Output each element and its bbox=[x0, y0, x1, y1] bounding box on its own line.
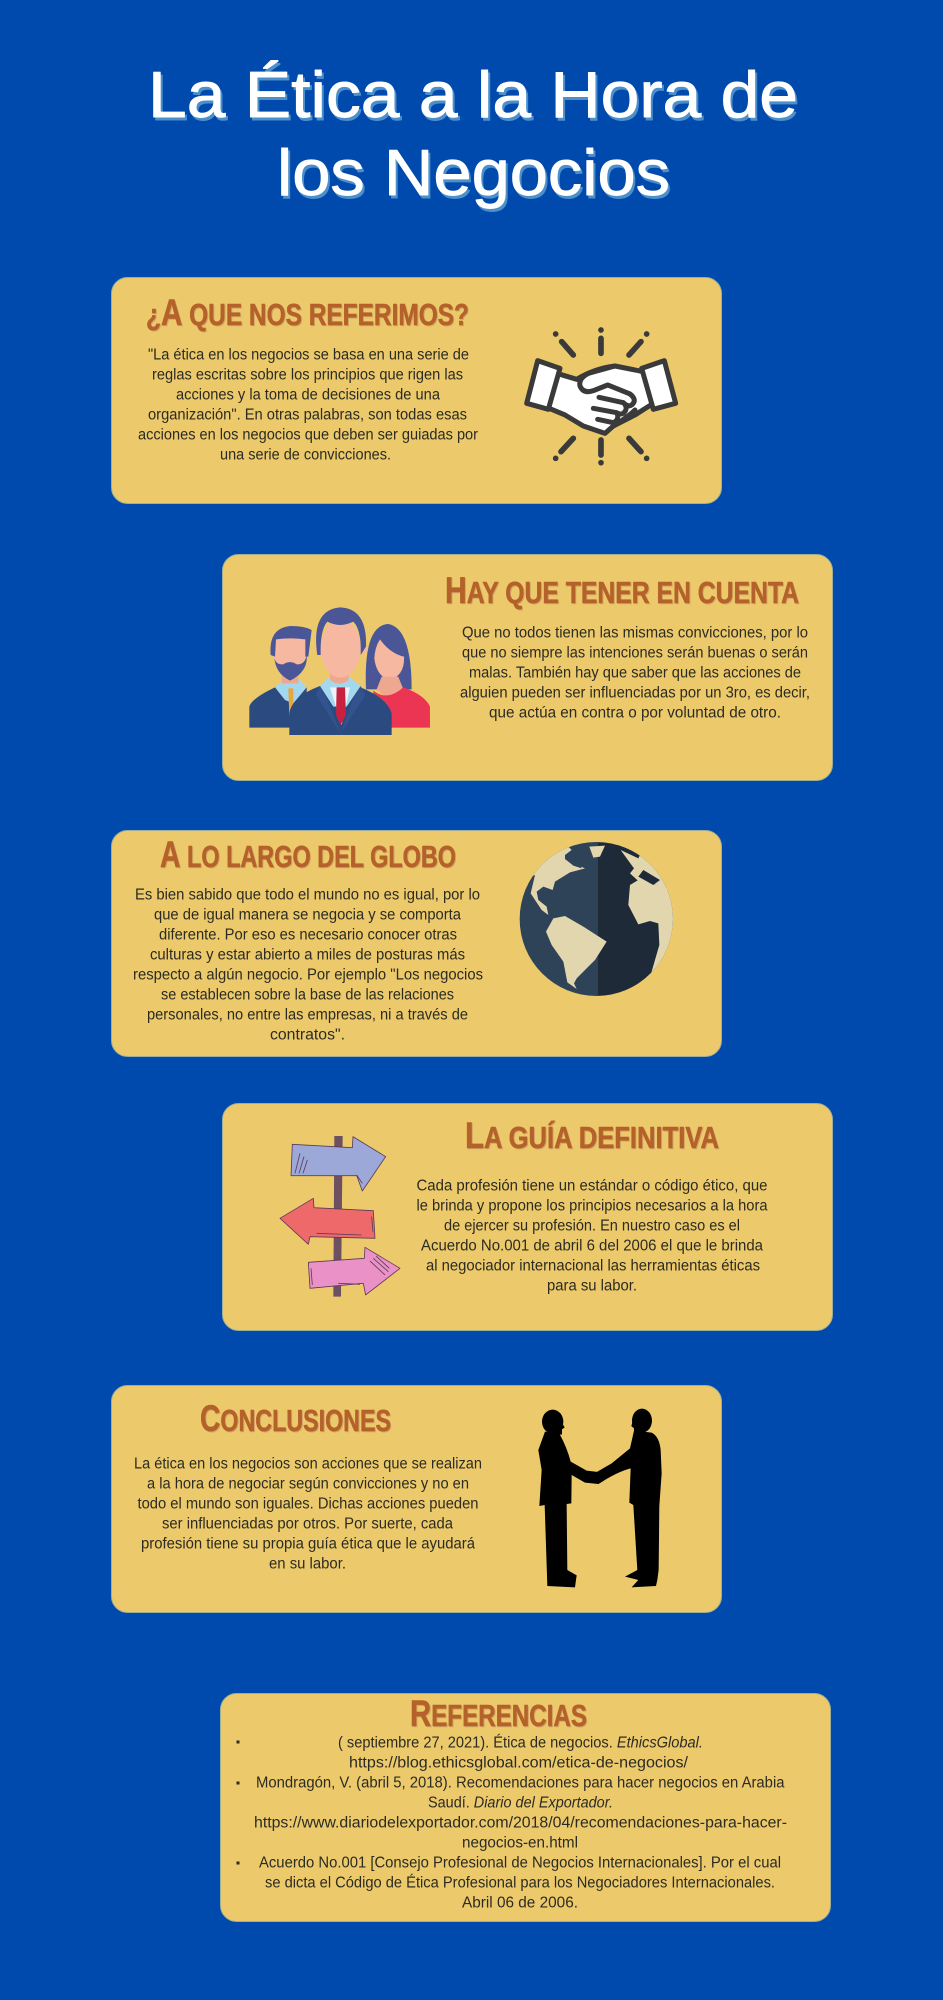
text block: convicciones bbox=[460, 624, 810, 722]
text block: conclusiones: a la hora de negociar según convicciones y no en bbox=[147, 1476, 469, 1492]
icon: silhouettes shaking hands bbox=[538, 1409, 662, 1587]
text block: culturas: Es bien sabido que todo el mundo no es igual, por lo bbox=[135, 886, 480, 904]
icon: business team bbox=[249, 607, 430, 735]
icon: globe bbox=[520, 842, 673, 996]
heading: hay que tener en cuenta: HAY QUE TENER EN CUENTA bbox=[445, 570, 799, 611]
text block: convicciones: que actúa en contra o por voluntad de otro. bbox=[489, 704, 781, 722]
title bbox=[148, 58, 798, 209]
text block: culturas: diferente. Por eso es necesario conocer otras bbox=[159, 926, 457, 944]
text block: conclusiones: en su labor. bbox=[269, 1556, 346, 1572]
heading: referencias: REFERENCIAS bbox=[410, 1693, 587, 1734]
text block: references: negocios-en.html bbox=[462, 1834, 578, 1852]
text block: convicciones: alguien pueden ser influenciadas por un 3ro, es decir, bbox=[460, 684, 810, 702]
panel: conclusiones bbox=[112, 1386, 722, 1612]
text block: definition: reglas escritas sobre los principios que rigen las bbox=[152, 366, 463, 384]
text block: references: se dicta el Código de Ética Profesional para los Negociadores Internacionales. bbox=[265, 1874, 775, 1892]
icon: handshake bbox=[527, 330, 676, 463]
text block: definition: "La ética en los negocios se basa en una serie de bbox=[148, 346, 469, 364]
text block: culturas: culturas y estar abierto a miles de posturas más bbox=[150, 946, 465, 964]
text block: references: ( septiembre 27, 2021). Ética de negocios. EthicsGlobal. bbox=[338, 1734, 703, 1752]
text block: references: Saudí. Diario del Exportador. bbox=[428, 1794, 613, 1812]
text block: culturas: respecto a algún negocio. Por ejemplo "Los negocios bbox=[133, 966, 483, 984]
panel: a lo largo del globo bbox=[112, 830, 722, 1056]
text block: references: Acuerdo No.001 [Consejo Profesional de Negocios Internacionales]. Por el cual bbox=[259, 1854, 781, 1872]
text block: culturas: personales, no entre las empresas, ni a través de bbox=[147, 1006, 468, 1024]
panel: referencias bbox=[220, 1693, 830, 1922]
heading: conclusiones: CONCLUSIONES bbox=[200, 1398, 391, 1439]
text block: conclusiones bbox=[134, 1456, 482, 1572]
text block: culturas: se establecen sobre la base de las relaciones bbox=[161, 986, 454, 1004]
text block: references: https://blog.ethicsglobal.com/etica-de-negocios/ bbox=[349, 1754, 689, 1772]
text block: codigo etico: Acuerdo No.001 de abril 6 del 2006 el que le brinda bbox=[421, 1238, 763, 1254]
text block: definition: acciones y la toma de decisiones de una bbox=[176, 386, 440, 404]
text block: definition bbox=[138, 346, 478, 464]
text block: definition: acciones en los negocios que deben ser guiadas por bbox=[138, 426, 478, 444]
text block: definition: una serie de convicciones. bbox=[220, 446, 391, 464]
panel: hay que tener en cuenta bbox=[222, 554, 832, 780]
text block: culturas: contratos". bbox=[270, 1026, 345, 1044]
text block: codigo etico: Cada profesión tiene un estándar o código ético, que bbox=[416, 1178, 768, 1194]
text block: codigo etico bbox=[416, 1178, 768, 1294]
text block: codigo etico: de ejercer su profesión. En nuestro caso es el bbox=[444, 1218, 740, 1234]
title: La Ética a la Hora de bbox=[148, 58, 798, 131]
icon: signpost arrows bbox=[280, 1136, 400, 1297]
heading: a lo largo del globo: A LO LARGO DEL GLOBO bbox=[160, 834, 456, 875]
text block: references: https://www.diariodelexportador.com/2018/04/recomendaciones-para-hacer- bbox=[254, 1814, 787, 1832]
text block: culturas: que de igual manera se negocia y se comporta bbox=[154, 906, 461, 924]
text block: conclusiones: profesión tiene su propia guía ética que le ayudará bbox=[141, 1536, 475, 1552]
panel: la guia definitiva bbox=[222, 1104, 832, 1330]
text block: convicciones: Que no todos tienen las mismas convicciones, por lo bbox=[462, 624, 808, 642]
text block: codigo etico: para su labor. bbox=[547, 1278, 637, 1294]
text block: references: Abril 06 de 2006. bbox=[462, 1894, 578, 1912]
list bullets bbox=[236, 1740, 240, 1864]
text block: convicciones: que no siempre las intenciones serán buenas o serán bbox=[462, 644, 808, 662]
text block: definition: organización". En otras palabras, son todas esas bbox=[148, 406, 467, 424]
text block: conclusiones: La ética en los negocios son acciones que se realizan bbox=[134, 1456, 482, 1472]
text block: codigo etico: al negociador internacional las herramientas éticas bbox=[426, 1258, 760, 1274]
text block: culturas bbox=[133, 886, 483, 1044]
heading: a que nos referimos: ¿A QUE NOS REFERIMOS? bbox=[146, 292, 469, 333]
title: los Negocios bbox=[277, 136, 670, 209]
heading: la guia definitiva: LA GUÍA DEFINITIVA bbox=[465, 1115, 719, 1156]
text block: convicciones: malas. También hay que saber que las acciones de bbox=[469, 664, 801, 682]
text block: conclusiones: todo el mundo son iguales. Dichas acciones pueden bbox=[138, 1496, 478, 1512]
text block: codigo etico: le brinda y propone los principios necesarios a la hora bbox=[416, 1198, 768, 1214]
text block: conclusiones: ser influenciadas por otros. Por suerte, cada bbox=[162, 1516, 453, 1532]
text block: references bbox=[254, 1734, 787, 1912]
text block: references: Mondragón, V. (abril 5, 2018). Recomendaciones para hacer negocios en Arabia bbox=[256, 1774, 785, 1792]
panel: a que nos referimos bbox=[112, 278, 722, 504]
